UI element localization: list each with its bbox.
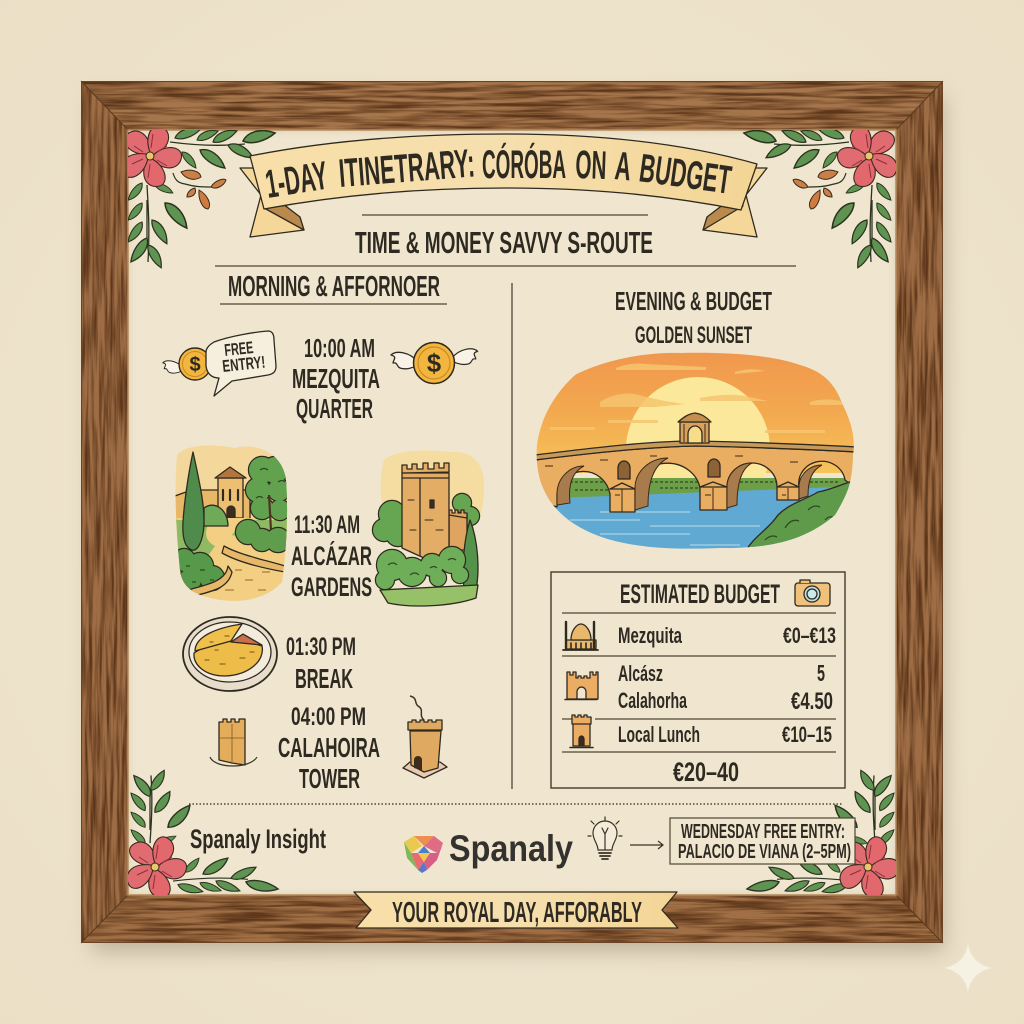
subtitle: TIME & MONEY SAVVY S-ROUTE (355, 225, 653, 260)
floral corner: top left (128, 130, 276, 269)
title text: A (613, 144, 633, 189)
row: Mezquita (618, 623, 836, 648)
logo gem (404, 836, 443, 873)
stop: Calahorra tower: TOWER (299, 763, 360, 794)
row: Alcazar and Calahorra: Calahorha (618, 688, 687, 713)
title text: CÓRÓBA (482, 141, 566, 187)
stop: Alcazar Gardens (291, 511, 372, 602)
arrow to tip (630, 841, 663, 849)
right tree (236, 457, 290, 552)
row: Local lunch: Local Lunch (618, 722, 700, 747)
bottom ribbon: YOUR ROYAL DAY, AFFORABLY (392, 897, 642, 929)
ribbon right tail (703, 168, 767, 237)
icon: tower with smoke (403, 696, 447, 778)
title text: 1-DAY (263, 154, 331, 207)
stop: Mezquita Quarter (292, 333, 380, 424)
illustration: Alcazar castle tower (373, 450, 484, 606)
bridge gate (680, 422, 709, 443)
low bushes (173, 549, 224, 591)
budget total: €20–40 (673, 757, 739, 787)
row: Mezquita: Mezquita (618, 623, 683, 648)
paper panel (121, 123, 903, 902)
icon: lightbulb (588, 817, 622, 859)
title text: ON (575, 143, 607, 188)
illustration: tortilla plate (183, 617, 277, 691)
garden palace (172, 467, 250, 520)
row: Alcazar and Calahorra: €4.50 (791, 688, 833, 715)
icon: tower (570, 715, 593, 748)
garden curb walls (188, 566, 232, 597)
row: Mezquita: €0–€13 (783, 623, 836, 648)
stop: Calahorra tower: CALAHOIRA (278, 732, 380, 763)
stop: Mezquita Quarter: MEZQUITA (292, 363, 380, 394)
icon: winged coin: $ (427, 350, 441, 378)
icon: small tower on disc (210, 719, 257, 766)
wooden frame (81, 81, 943, 943)
heading: morning and afternoon: MORNING & AFFORNOER (228, 271, 440, 303)
row: Local lunch: €10–15 (782, 722, 832, 747)
callout: Wednesday free entry (670, 818, 855, 864)
title ribbon (240, 134, 767, 237)
icon: castle (565, 672, 598, 700)
sky (530, 348, 860, 473)
heading: evening: EVENING & BUDGET (615, 286, 772, 316)
clouds (550, 364, 845, 433)
icon: free entry coin and speech bubble: ENTRY! (221, 353, 266, 376)
floral corner: bottom left (123, 769, 279, 899)
green foreground hill (747, 481, 850, 548)
stop: break: 01:30 PM (286, 633, 356, 661)
illustration: bridge at golden sunset (530, 348, 860, 552)
logo: Spanaly (404, 828, 573, 873)
title text: BUDGET (637, 146, 734, 203)
stop: Calahorra tower: 04:00 PM (291, 703, 366, 731)
bottom ribbon (354, 892, 678, 929)
floral corner: top right (743, 123, 901, 270)
sun (626, 377, 770, 478)
floral corner: bottom right (746, 769, 901, 899)
floral corners (118, 123, 901, 899)
garden sandy ground (176, 518, 287, 601)
callout: Wednesday free entry: WEDNESDAY FREE ENTRY: (681, 821, 845, 843)
water (548, 486, 849, 549)
stop: Alcazar Gardens: ALCÁZAR (291, 540, 372, 571)
stop: Alcazar Gardens: 11:30 AM (294, 511, 360, 539)
illustration: Alcazar gardens path (176, 445, 288, 601)
stop: break (286, 633, 356, 694)
heading: evening (615, 286, 772, 349)
dotted footer rule (189, 803, 843, 805)
ribbon body (250, 134, 757, 210)
ribbon left tail (240, 168, 304, 237)
row: Alcazar and Calahorra: Alcász (618, 661, 663, 686)
stop: Mezquita Quarter: 10:00 AM (304, 333, 375, 363)
icon: mosque (563, 622, 598, 650)
budget rows dividers (562, 613, 836, 752)
divider lines (215, 215, 796, 789)
frame drop shadow (92, 96, 944, 951)
icon: camera (795, 580, 830, 606)
callout: Wednesday free entry: PALACIO DE VIANA (2–5PM) (678, 841, 851, 863)
arch undersides (557, 458, 822, 510)
row: Alcazar and Calahorra (618, 660, 833, 715)
title text: ITINETRARY: (337, 141, 476, 196)
row: Local lunch (618, 722, 832, 747)
stop: Calahorra tower (278, 703, 380, 794)
bridge (535, 446, 858, 512)
footer label: Spanaly Insight: Spanaly Insight (190, 824, 326, 854)
title text (263, 141, 734, 207)
panel: estimated budget (551, 572, 845, 788)
icon: free entry coin and speech bubble (163, 331, 276, 396)
far bank (560, 478, 850, 498)
heading: evening: GOLDEN SUNSET (635, 322, 752, 349)
pier caps (610, 482, 799, 489)
icon: winged coin (391, 343, 478, 383)
row: Alcazar and Calahorra: 5 (817, 660, 825, 686)
budget heading: ESTIMATED BUDGET (620, 579, 780, 609)
logo: Spanaly: Spanaly (449, 828, 573, 869)
icon: free entry coin and speech bubble: FREE (223, 338, 254, 360)
cypress (183, 452, 204, 550)
stop: break: BREAK (295, 663, 353, 694)
stop: Mezquita Quarter: QUARTER (296, 393, 373, 424)
sparkle mark (944, 944, 992, 992)
arch windows (618, 459, 720, 479)
stop: Alcazar Gardens: GARDENS (291, 572, 372, 602)
